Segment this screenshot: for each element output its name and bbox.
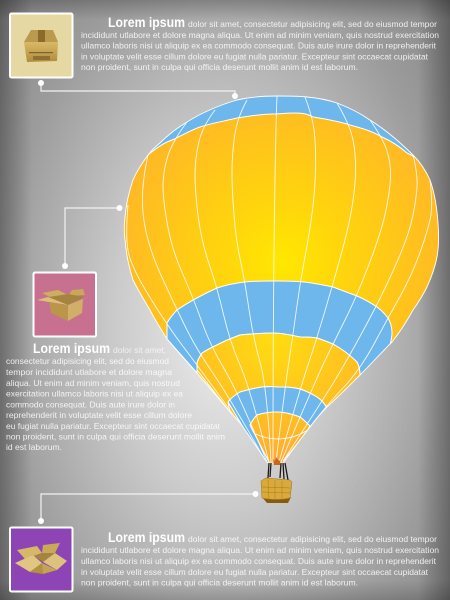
neck yellow section <box>250 412 310 464</box>
body: bottom: ullamco laboris nisi ut aliquip ex ea commodo consequat. Duis aute irure dolor in reprehenderit <box>81 556 437 566</box>
body: middle: id est laborum. <box>6 442 62 452</box>
panel: top icon box <box>10 14 72 78</box>
heading: middle: Lorem ipsum <box>33 341 110 356</box>
body: bottom: dolor sit amet, consectetur adipisicing elit, sed do eiusmod tempor <box>188 534 437 544</box>
icon: open cardboard box <box>37 289 92 321</box>
body: bottom: incididunt utlabore et dolore magna aliqua. Ut enim ad minim veniam, quis nostrud exercitation <box>81 545 439 555</box>
connector: middle box to balloon <box>62 205 122 269</box>
heading: top: Lorem ipsum <box>108 15 185 30</box>
body: middle: dolor sit amet, <box>113 345 166 355</box>
icon: open box from above <box>15 543 67 574</box>
body: top: ullamco laboris nisi ut aliquip ex ea commodo consequat. Duis aute irure dolor in reprehenderit <box>81 40 437 50</box>
connector: top box to balloon <box>38 80 238 99</box>
body: middle <box>6 345 225 452</box>
balloon seams <box>127 96 432 462</box>
burner flame <box>273 457 280 465</box>
body: bottom: non proident, sunt in culpa qui officia deserunt mollit anim id est laborum. <box>81 578 358 588</box>
body: bottom: in voluptate velit esse cillum dolore eu fugiat nulla pariatur. Excepteur sint occaecat cupidatat <box>81 567 429 577</box>
lower yellow band <box>197 333 360 412</box>
body: top: dolor sit amet, consectetur adipisicing elit, sed do eiusmod tempor <box>188 19 437 29</box>
body: middle: consectetur adipisicing elit, sed do eiusmod <box>6 356 169 366</box>
text block: middle <box>6 341 225 452</box>
hot air balloon <box>110 90 450 503</box>
panel: bottom icon box <box>10 528 72 592</box>
panel: middle icon box <box>34 272 96 336</box>
top blue band <box>148 96 415 158</box>
heading: bottom: Lorem ipsum <box>108 530 185 545</box>
balloon envelope <box>124 96 438 462</box>
text block: bottom <box>81 530 439 588</box>
connector: bottom box to basket <box>38 491 258 524</box>
balloon outline <box>124 96 439 463</box>
basket <box>261 478 292 503</box>
body: middle: exercitation ullamco laboris nisi ut aliquip ex ea <box>6 388 183 398</box>
body: middle: reprehenderit in voluptate velit esse cillum dolore <box>6 410 192 420</box>
icon: closed cardboard box <box>24 30 58 62</box>
body: top: in voluptate velit esse cillum dolore eu fugiat nulla pariatur. Excepteur sint occaecat cupidatat <box>81 52 429 62</box>
body: middle: eu fugiat nulla pariatur. Excepteur sint occaecat cupidatat <box>6 421 221 431</box>
body: bottom <box>81 534 439 588</box>
text block: top <box>81 15 439 72</box>
basket ropes <box>268 463 288 480</box>
body: middle: non proident, sunt in culpa qui officia deserunt mollit anim <box>6 432 225 442</box>
lower blue band <box>167 281 392 378</box>
small blue band <box>228 387 327 463</box>
body: top <box>81 19 439 72</box>
body: top: non proident, sunt in culpa qui officia deserunt mollit anim id est laborum. <box>81 62 358 72</box>
body: top: incididunt utlabore et dolore magna aliqua. Ut enim ad minim veniam, quis nostrud exercitation <box>81 30 439 40</box>
body: middle: tempor incididunt utlabore et dolore magna <box>6 367 172 377</box>
body: middle: aliqua. Ut enim ad minim veniam, quis nostrud <box>6 378 180 388</box>
body: middle: commodo consequat. Duis aute irure dolor in <box>6 400 175 410</box>
